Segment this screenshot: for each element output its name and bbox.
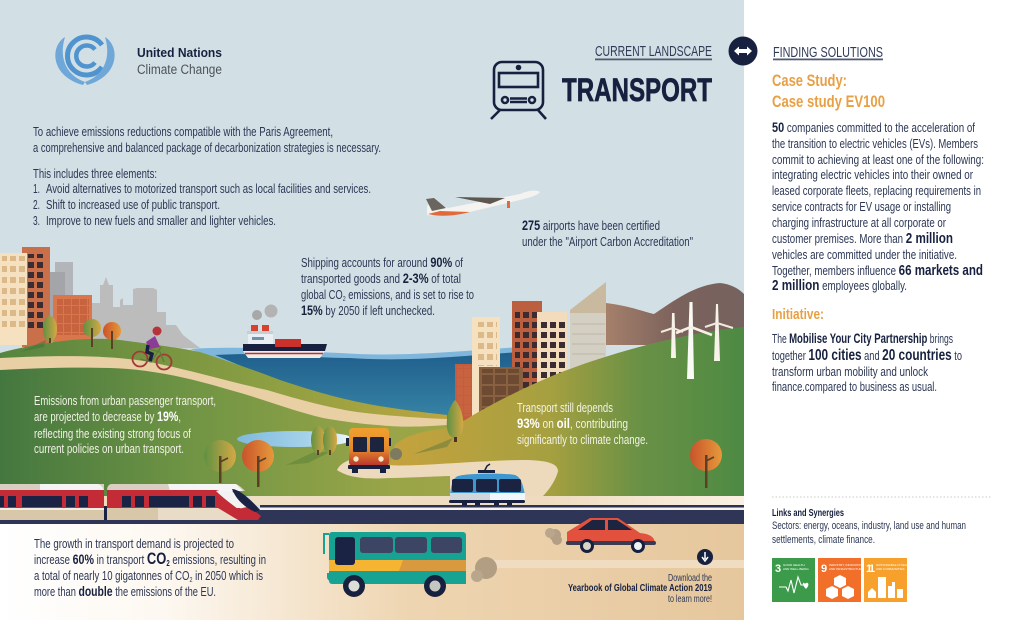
text block: urban passenger transport: current policies on urban transport. bbox=[34, 442, 184, 456]
text block: transport demand: 2 bbox=[166, 559, 170, 568]
text block: introduction: 3. bbox=[33, 214, 40, 228]
icon: SDG 11: AND COMMUNITIES bbox=[876, 567, 904, 571]
heading: initiative: Initiative: bbox=[772, 306, 824, 323]
icon: SDG 3 bbox=[772, 558, 815, 602]
text block: oil dependency: significantly to climate change. bbox=[517, 433, 648, 447]
text block: shipping: 2 bbox=[343, 296, 346, 303]
icon: SDG 9 bbox=[818, 558, 864, 602]
text block: download link bbox=[568, 572, 712, 605]
text block: links and synergies: settlements, climate finance. bbox=[772, 534, 875, 546]
text block: transport demand bbox=[34, 537, 266, 599]
icon: cyclist bbox=[132, 326, 172, 370]
text block: airports: under the "Airport Carbon Accreditation" bbox=[522, 235, 693, 249]
icon: red car bbox=[545, 518, 656, 553]
text block: Mobilise Your City bbox=[772, 330, 962, 394]
text block: links and synergies bbox=[772, 507, 966, 546]
heading: current landscape bbox=[595, 43, 712, 60]
text block: introduction: Avoid alternatives to motorized transport such as local facilities and services. bbox=[46, 182, 371, 196]
water bbox=[190, 347, 520, 425]
icon: download arrow bbox=[697, 549, 713, 565]
heading: organisation name: United Nations bbox=[137, 45, 222, 60]
icon: SDG 3: GOOD HEALTH bbox=[783, 563, 805, 567]
icon: SDG 3: 3 bbox=[775, 563, 781, 575]
text block: urban passenger transport: Emissions from urban passenger transport, bbox=[34, 394, 216, 408]
text block: introduction: a comprehensive and balanced package of decarbonization strategies is necessary. bbox=[33, 141, 381, 155]
text block: EV100 case study bbox=[772, 119, 984, 294]
icon: train front bbox=[491, 62, 546, 119]
back hill bbox=[0, 339, 447, 470]
text block: oil dependency: Transport still depends bbox=[517, 401, 613, 415]
bottom sand panel bbox=[0, 524, 744, 620]
text block: transport demand: 2 bbox=[189, 577, 193, 584]
text block: EV100 case study: service contracts for EV usage or installing bbox=[772, 200, 951, 214]
icon: SDG 11 bbox=[864, 558, 907, 602]
title: TRANSPORT bbox=[562, 72, 712, 108]
icon: SDG 9: 9 bbox=[821, 563, 827, 575]
text block: EV100 case study: integrating electric vehicles into their owned or bbox=[772, 168, 973, 182]
landscape illustration bbox=[0, 247, 744, 496]
background: current landscape panel bbox=[0, 0, 744, 620]
heading: organisation name: Climate Change bbox=[137, 62, 222, 77]
text block: EV100 case study: vehicles are committed under the initiative. bbox=[772, 248, 957, 262]
text block: airports bbox=[522, 217, 693, 249]
icon: red train bbox=[0, 484, 262, 524]
panel: finding solutions bbox=[772, 44, 992, 602]
text block: EV100 case study: 2 million employees globally. bbox=[772, 277, 907, 294]
text block: introduction: To achieve emissions reductions compatible with the Paris Agreement, bbox=[33, 125, 333, 139]
icon: double arrow bbox=[728, 36, 758, 66]
icon: green bus bbox=[323, 532, 497, 597]
text block: Mobilise Your City: together 100 cities and 20 countries to bbox=[772, 347, 962, 364]
heading: case study: Case Study: bbox=[772, 71, 847, 90]
text block: introduction: 1. bbox=[33, 182, 40, 196]
text block: EV100 case study: customer premises. More than 2 million bbox=[772, 230, 953, 247]
heading: organisation name bbox=[137, 45, 222, 77]
text block: oil dependency: 93% on oil, contributing bbox=[517, 415, 628, 431]
text block: Mobilise Your City: finance.compared to business as usual. bbox=[772, 380, 937, 394]
text block: shipping: transported goods and 2-3% of total bbox=[301, 270, 461, 286]
text block: EV100 case study: 50 companies committed to the acceleration of bbox=[772, 119, 975, 135]
text block: transport demand: The growth in transport demand is projected to bbox=[34, 537, 234, 551]
text block: shipping: global CO bbox=[301, 288, 357, 302]
text block: introduction: This includes three elements: bbox=[33, 167, 157, 181]
icon: airplane bbox=[426, 191, 540, 216]
text block: oil dependency bbox=[517, 401, 648, 447]
right hill bbox=[388, 327, 744, 496]
text block: introduction: Improve to new fuels and smaller and lighter vehicles. bbox=[46, 214, 276, 228]
left city skyline bbox=[0, 247, 200, 350]
text block: download link: Download the bbox=[668, 572, 712, 584]
text block: Mobilise Your City: The Mobilise Your City Partnership brings bbox=[772, 330, 953, 346]
text block: download link: to learn more! bbox=[668, 593, 712, 605]
heading: finding solutions: FINDING SOLUTIONS bbox=[773, 44, 883, 61]
trees bbox=[20, 316, 722, 488]
text block: Mobilise Your City: transform urban mobility and unlock bbox=[772, 365, 929, 379]
icon: school bus bbox=[346, 428, 402, 473]
text block: transport demand: more than double the emissions of the EU. bbox=[34, 583, 216, 599]
text block: urban passenger transport: reflecting the existing strong focus of bbox=[34, 427, 191, 441]
text block: urban passenger transport bbox=[34, 394, 216, 456]
icon: SDG 9: AND INFRASTRUCTURE bbox=[829, 567, 864, 571]
lake bbox=[237, 431, 353, 447]
beige footpath bbox=[0, 356, 447, 427]
icon: tram bbox=[449, 464, 525, 506]
text block: urban passenger transport: are projected to decrease by 19%, bbox=[34, 408, 181, 424]
text block: shipping bbox=[301, 254, 474, 318]
text block: transport demand: emissions, resulting in bbox=[170, 553, 266, 567]
icon: SDG 3: AND WELL-BEING bbox=[783, 567, 809, 571]
text block: shipping: Shipping accounts for around 90% of bbox=[301, 254, 463, 270]
heading: case study: Case study EV100 bbox=[772, 92, 885, 111]
text block: EV100 case study: charging infrastructure at all corporate or bbox=[772, 216, 946, 230]
lower left hill bbox=[0, 363, 560, 496]
text block: introduction bbox=[33, 125, 381, 228]
text block: airports: 275 airports have been certified bbox=[522, 217, 660, 233]
heading: current landscape: CURRENT LANDSCAPE bbox=[595, 43, 712, 60]
wind turbines bbox=[661, 302, 733, 379]
road strip bbox=[0, 496, 744, 524]
text block: shipping: 15% by 2050 if left unchecked. bbox=[301, 302, 435, 318]
icon: SDG 9: INDUSTRY, INNOVATION bbox=[829, 563, 864, 567]
icon: ship with smoke bbox=[243, 304, 327, 358]
curving beige road bbox=[337, 458, 558, 496]
text block: transport demand: a total of nearly 10 gigatonnes of CO bbox=[34, 569, 238, 583]
text block: introduction: Shift to increased use of public transport. bbox=[46, 198, 220, 212]
right city buildings bbox=[455, 282, 744, 427]
text block: transport demand: in 2050 which is bbox=[192, 569, 263, 583]
text block: links and synergies: Links and Synergies bbox=[772, 507, 844, 519]
text block: download link: Yearbook of Global Climate Action 2019 bbox=[568, 582, 712, 594]
logo: UN Climate Change emblem bbox=[55, 37, 115, 85]
text block: shipping: emissions, and is set to rise to bbox=[346, 288, 474, 302]
text block: EV100 case study: Together, members influence 66 markets and bbox=[772, 262, 983, 279]
icon: SDG 11: SUSTAINABLE CITIES bbox=[876, 563, 907, 567]
heading: case study bbox=[772, 71, 885, 111]
text block: introduction: 2. bbox=[33, 198, 40, 212]
icon: SDG 11: 11 bbox=[866, 563, 875, 575]
text block: transport demand: increase 60% in transport CO bbox=[34, 549, 172, 568]
